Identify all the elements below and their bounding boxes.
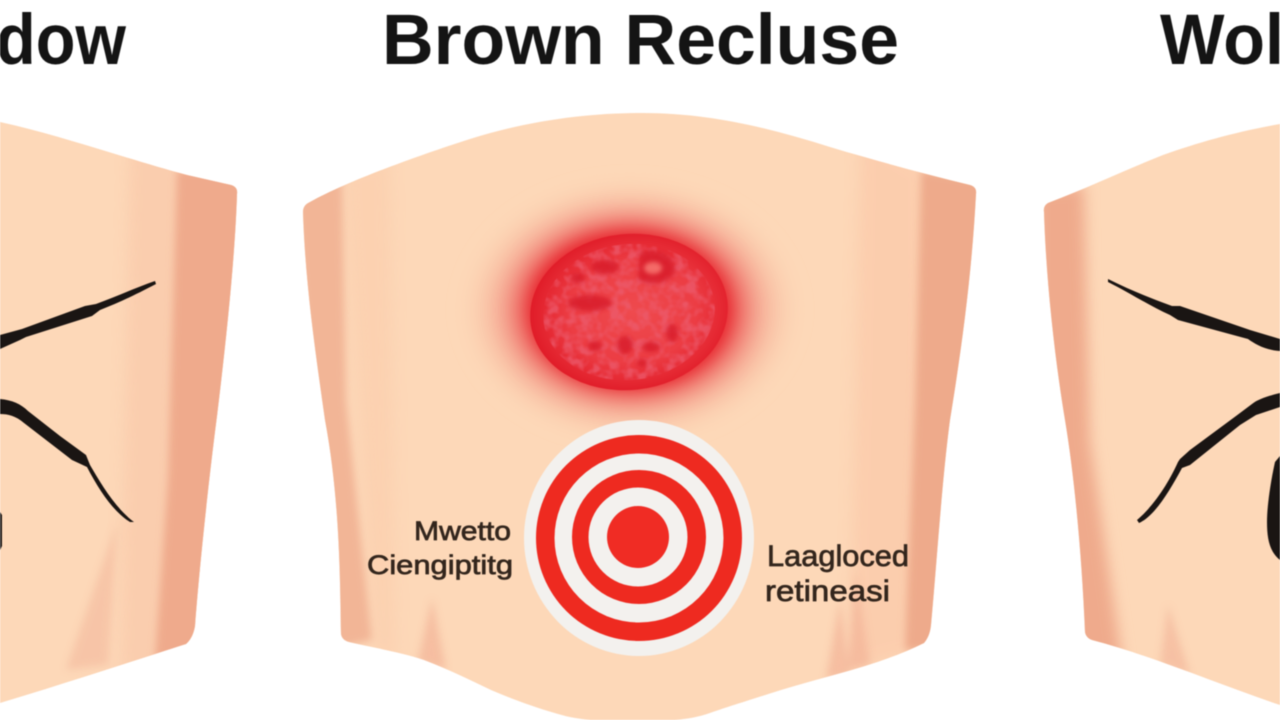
icon: bullseye target (524, 420, 754, 656)
label: left of target (367, 516, 513, 580)
label: right of target: retineasi (765, 575, 890, 608)
skin patch: centre (295, 105, 985, 720)
icon: spider legs and body right (1108, 279, 1280, 560)
panel: left skin with spider legs (0, 110, 245, 710)
skin creases (418, 588, 870, 676)
bite lesion (522, 224, 736, 400)
lesion mottling (536, 235, 722, 389)
label: right of target (765, 540, 909, 608)
heading: widow (cropped): dow (0, 1, 127, 80)
lesion texture (568, 251, 678, 367)
panel: brown recluse bite (295, 105, 985, 720)
label: left of target: Ciengiptitg (367, 550, 513, 580)
bite halo (455, 174, 805, 446)
skin patch: right (1035, 110, 1280, 710)
heading: brown recluse: Brown Recluse (382, 1, 899, 80)
label: left of target: Mwetto (414, 516, 511, 546)
label: right of target: Laagloced (767, 540, 909, 573)
icon: spider legs left (0, 281, 156, 550)
skin patch: left (0, 110, 245, 710)
panel: right skin with spider legs (1035, 110, 1280, 710)
